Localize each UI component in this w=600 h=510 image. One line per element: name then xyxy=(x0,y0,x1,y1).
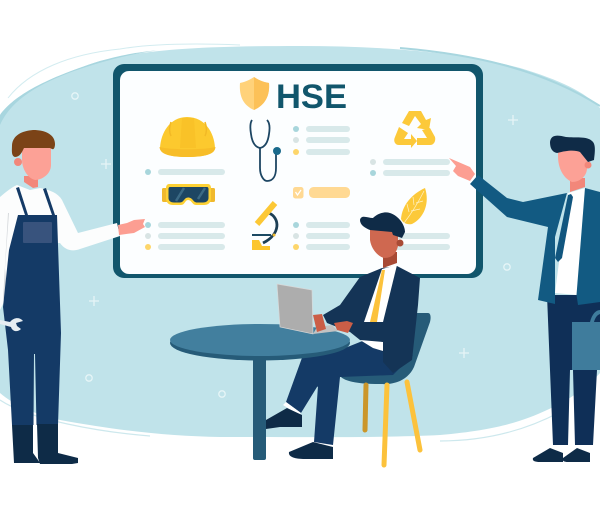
title: HSE xyxy=(276,78,347,116)
seated man hair xyxy=(360,212,405,238)
presenter shoes xyxy=(533,448,590,462)
presentation board xyxy=(113,64,483,278)
chair xyxy=(340,313,431,384)
worker wrench xyxy=(0,318,23,331)
seated man shoes xyxy=(266,408,333,459)
icon: safety goggles xyxy=(162,184,215,205)
laptop xyxy=(277,284,313,334)
seated man face xyxy=(370,228,398,258)
far trouser leg xyxy=(286,352,350,413)
icon: stethoscope xyxy=(250,120,281,181)
near trouser leg xyxy=(314,340,413,445)
seated man jacket xyxy=(323,266,420,373)
socks xyxy=(283,402,333,449)
icon: hard hat xyxy=(160,117,216,157)
presenter neck xyxy=(570,178,585,192)
worker neck xyxy=(24,176,38,188)
presenter face xyxy=(558,148,587,182)
decorative sparkles xyxy=(72,93,518,397)
list: hard hat bullet xyxy=(145,169,225,175)
worker boots xyxy=(12,424,78,464)
list: stethoscope bullets xyxy=(293,126,350,155)
presenter trousers xyxy=(547,295,600,445)
list: recycling bullets xyxy=(370,159,450,176)
presenter hair xyxy=(550,136,595,162)
checkbox row xyxy=(293,187,350,198)
worker ear xyxy=(14,158,22,166)
icon: leaf xyxy=(401,188,427,224)
icon: recycling symbol xyxy=(394,111,435,148)
worker hand xyxy=(118,219,145,235)
seated man neck xyxy=(383,252,397,268)
presenter tie xyxy=(555,194,573,262)
seated man hands xyxy=(313,314,353,333)
chair legs xyxy=(365,385,366,430)
worker overalls xyxy=(3,187,61,425)
figure: presenting man xyxy=(449,136,600,462)
worker hair xyxy=(12,130,55,157)
figure: worker in overalls xyxy=(0,130,145,464)
icon: shield xyxy=(240,77,269,110)
presenter hand xyxy=(449,158,475,181)
worker shirt xyxy=(0,185,120,310)
figure: seated man upper body xyxy=(277,212,420,373)
overalls pocket xyxy=(23,222,52,243)
icon: microscope xyxy=(252,203,277,250)
figure: seated man lower body and chair xyxy=(266,313,431,465)
presenter shirt xyxy=(555,188,585,295)
list: leaf bullets xyxy=(383,233,450,250)
list: microscope bullets xyxy=(293,222,350,250)
worker face xyxy=(22,145,51,180)
table xyxy=(170,324,350,460)
briefcase xyxy=(572,310,600,370)
background blob xyxy=(0,44,600,441)
presenter jacket and arm xyxy=(470,175,600,305)
seated man shirt and tie xyxy=(364,265,397,322)
list: goggles bullets xyxy=(145,222,225,250)
